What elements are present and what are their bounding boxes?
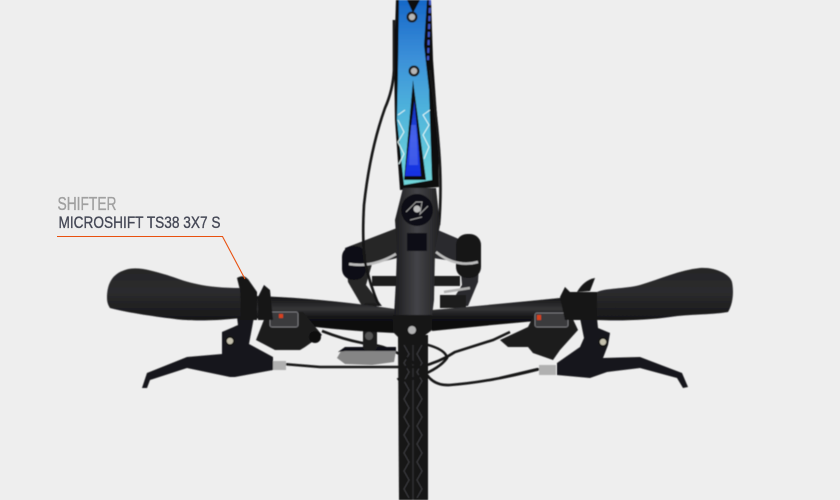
- frame bolts: [406, 12, 418, 22]
- right shifter pod: [500, 313, 578, 360]
- left brake lever: [142, 317, 273, 388]
- front tire: [398, 335, 428, 500]
- left grip: [107, 268, 241, 320]
- right grip: [597, 268, 733, 320]
- right brake lever and shifter pod: [500, 278, 688, 388]
- callout: shifter label: [57, 194, 245, 279]
- reflector: [337, 303, 396, 365]
- stem top cap: [401, 194, 433, 226]
- frame down tube: [394, 0, 439, 190]
- right gear display: [535, 313, 568, 327]
- left clamp and shifter tab: [237, 276, 257, 320]
- bicycle photo illustration: [107, 0, 733, 500]
- left gear display: [270, 312, 298, 327]
- stem clamp bolt: [408, 326, 416, 334]
- handlebar: [255, 296, 570, 333]
- callout leader line: [57, 236, 245, 279]
- right brake lever: [557, 318, 688, 388]
- callout product name: MICROSHIFT TS38 3X7 S: [58, 213, 220, 232]
- right cable connector: [539, 365, 556, 375]
- stem: [393, 188, 440, 339]
- left shifter pod: [256, 312, 322, 350]
- brake arms behind bar: [342, 228, 481, 308]
- left brake lever and shifter pod: [142, 276, 322, 388]
- right clamp and shifter tab: [560, 287, 597, 320]
- brake and shift cables: [283, 20, 540, 385]
- left cable connector: [273, 361, 286, 370]
- callout category label: SHIFTER: [58, 194, 116, 214]
